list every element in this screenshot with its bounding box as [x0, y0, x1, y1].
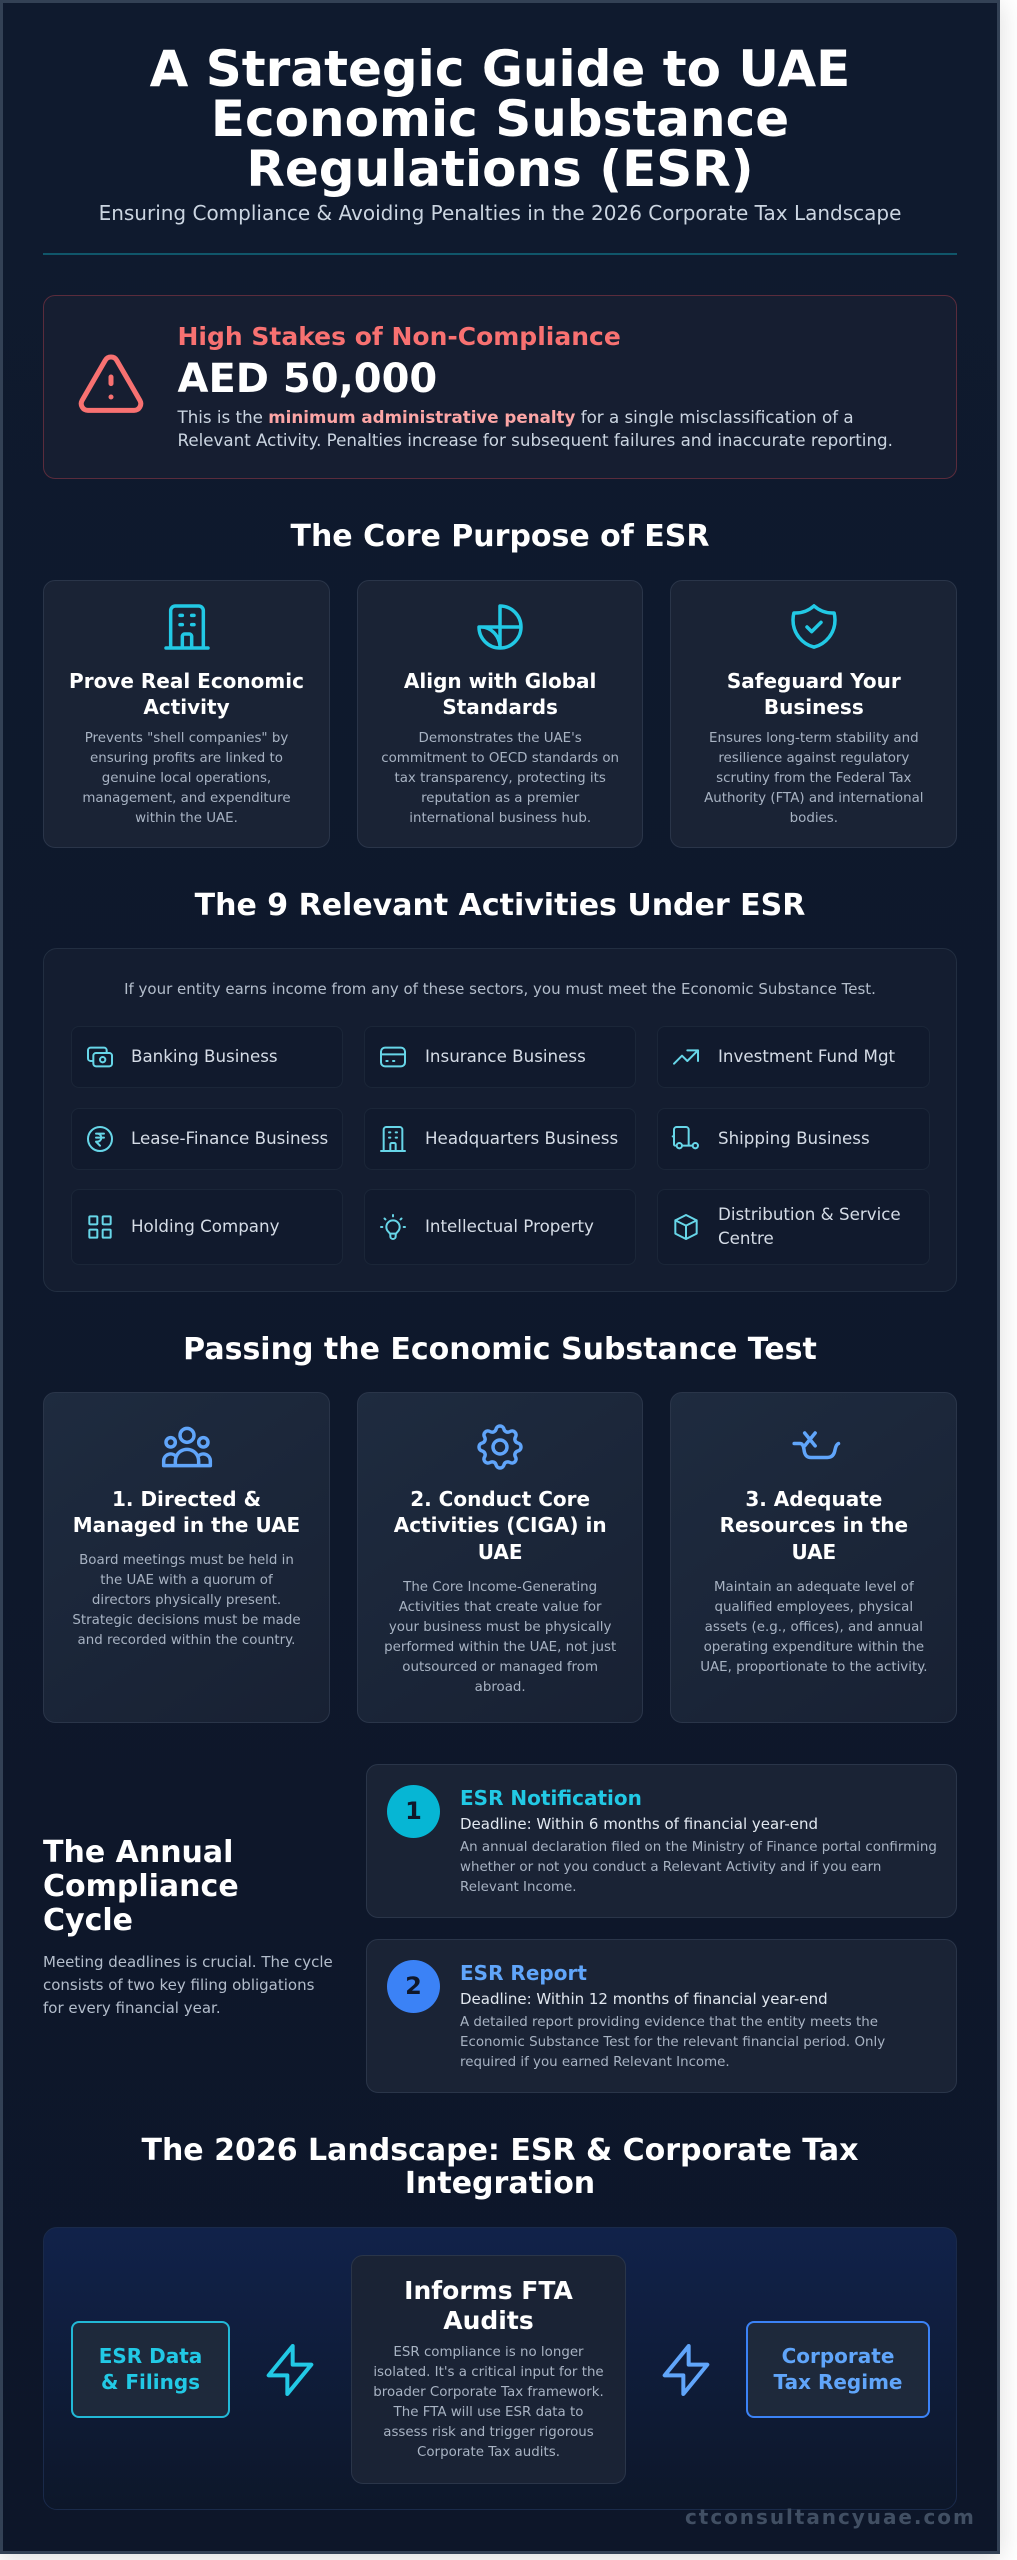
- card text: Board meetings must be held in: [79, 1552, 294, 1568]
- heading: annual compliance cycle: [43, 1835, 239, 1938]
- heading: core purpose: The Core Purpose of ESR: [290, 519, 710, 554]
- node text: [373, 2344, 604, 2460]
- label: [718, 1204, 901, 1248]
- card text: abroad.: [475, 1680, 526, 1694]
- step number: 2: [405, 1972, 422, 2000]
- title: A Strategic Guide to UAE: [150, 40, 850, 98]
- card text: [704, 730, 924, 826]
- card text: [381, 730, 619, 826]
- panel: core activities: [357, 1392, 643, 1723]
- activity: holding company: [71, 1189, 343, 1265]
- card text: your business must be physically: [389, 1620, 611, 1634]
- card title: Align with Global: [404, 669, 596, 693]
- alert text: Relevant Activity. Penalties increase for subsequent failures and inaccurate reporting.: [178, 430, 893, 450]
- icon: office building: [380, 1126, 406, 1152]
- label: Banking Business: [131, 1046, 278, 1066]
- alert heading: High Stakes of Non-Compliance: [178, 322, 621, 351]
- step text: whether or not you conduct a Relevant Activity and if you earn: [460, 1860, 881, 1875]
- label: Investment Fund Mgt: [718, 1046, 895, 1066]
- label: Lease-Finance Business: [131, 1128, 328, 1148]
- panel: relevant activities: [43, 948, 957, 1292]
- icon: warning triangle: [78, 354, 144, 413]
- icon: gear: [477, 1424, 523, 1470]
- heading: annual compliance cycle: Compliance: [43, 1869, 239, 1904]
- node: corporate tax regime: [746, 2321, 930, 2418]
- step text: [460, 1840, 937, 1895]
- icon: resources vessel: [792, 1431, 840, 1460]
- card text: bodies.: [790, 810, 838, 826]
- panel: adequate resources: [670, 1392, 957, 1723]
- card title: [73, 1487, 300, 1537]
- step text: [460, 2015, 885, 2070]
- panel: step 1 notification: [366, 1764, 957, 1918]
- card text: tax transparency, protecting its: [394, 770, 606, 786]
- icon: truck: [672, 1126, 699, 1150]
- node: ESR data and filings: [71, 2321, 230, 2418]
- node title: Informs FTA: [404, 2276, 573, 2304]
- card text: resilience against regulatory: [718, 750, 909, 766]
- activity: investment fund: [657, 1026, 930, 1088]
- node: corporate tax regime: Tax Regime: [774, 2370, 902, 2394]
- card text: scrutiny from the Federal Tax: [716, 770, 912, 786]
- node text: The FTA will use ESR data to: [394, 2404, 583, 2420]
- step number: [387, 1960, 440, 2013]
- card title: [720, 1487, 908, 1564]
- intro text: If your entity earns income from any of these sectors, you must meet the Economic Substance Test.: [124, 980, 876, 998]
- label: Centre: [718, 1228, 774, 1248]
- label: Shipping Business: [718, 1128, 870, 1148]
- card title: 2. Conduct Core: [410, 1487, 590, 1511]
- card text: Ensures long-term stability and: [709, 730, 919, 746]
- card text: Activities that create value for: [399, 1600, 602, 1614]
- step deadline: Deadline: Within 12 months of financial year-end: [460, 1990, 828, 2008]
- subtitle: Ensuring Compliance & Avoiding Penalties in the 2026 Corporate Tax Landscape: [99, 201, 901, 225]
- card title: [394, 1487, 607, 1564]
- activity: lease finance: [71, 1108, 343, 1170]
- card text: Prevents "shell companies" by: [85, 730, 288, 746]
- card title: [727, 669, 901, 719]
- card text: performed within the UAE, not just: [384, 1640, 616, 1654]
- node text: broader Corporate Tax framework.: [373, 2384, 604, 2400]
- activity: intellectual property: [364, 1189, 636, 1265]
- cycle description: for every financial year.: [43, 1999, 221, 2017]
- card text: qualified employees, physical: [715, 1600, 913, 1614]
- step text: required if you earned Relevant Income.: [460, 2055, 730, 2070]
- card text: reputation as a premier: [421, 790, 579, 806]
- node title: Audits: [443, 2306, 534, 2334]
- label: Insurance Business: [425, 1046, 586, 1066]
- panel: align with global standards: [357, 580, 643, 848]
- panel: directed and managed: [43, 1392, 330, 1723]
- step heading: ESR Report: [460, 1960, 587, 1984]
- cycle description: consists of two key filing obligations: [43, 1976, 314, 1994]
- title: [150, 40, 850, 198]
- panel: high stakes alert: [43, 295, 957, 479]
- card text: Maintain an adequate level of: [714, 1580, 914, 1594]
- icon: cash: [87, 1046, 113, 1068]
- card title: Business: [764, 695, 864, 719]
- card text: management, and expenditure: [82, 790, 291, 806]
- card title: Resources in the: [720, 1513, 908, 1537]
- card title: Prove Real Economic: [69, 669, 304, 693]
- activity: distribution and service centre: [657, 1189, 930, 1265]
- card text: [72, 1552, 301, 1648]
- card text: Demonstrates the UAE's: [419, 730, 582, 746]
- node: ESR data and filings: ESR Data: [99, 2344, 202, 2368]
- icon: globe segments: [477, 604, 523, 650]
- card text: within the UAE.: [135, 810, 238, 826]
- card title: 3. Adequate: [745, 1487, 882, 1511]
- card title: 1. Directed &: [112, 1487, 261, 1511]
- card text: UAE, proportionate to the activity.: [700, 1660, 927, 1674]
- title: Economic Substance: [211, 90, 789, 148]
- node text: isolated. It's a critical input for the: [373, 2364, 604, 2380]
- card title: UAE: [791, 1540, 836, 1564]
- card text: operating expenditure within the: [704, 1640, 924, 1654]
- card title: Activity: [143, 695, 230, 719]
- card text: international business hub.: [409, 810, 591, 826]
- heading: 2026 landscape: Integration: [405, 2166, 595, 2201]
- card text: genuine local operations,: [102, 770, 271, 786]
- cycle description: Meeting deadlines is crucial. The cycle: [43, 1953, 333, 1971]
- alert text: [177, 407, 893, 450]
- node text: assess risk and trigger rigorous: [383, 2424, 594, 2440]
- icon: card: [380, 1046, 406, 1068]
- heading: annual compliance cycle: The Annual: [43, 1835, 233, 1870]
- card title: Safeguard Your: [727, 669, 901, 693]
- icon: building: [164, 604, 210, 650]
- step text: A detailed report providing evidence that the entity meets the: [460, 2015, 878, 2030]
- step number: 1: [405, 1797, 422, 1825]
- step number: [387, 1785, 440, 1838]
- card title: Managed in the UAE: [73, 1513, 300, 1537]
- card text: the UAE with a quorum of: [100, 1572, 273, 1588]
- panel: prove real economic activity: [43, 580, 330, 848]
- card text: Strategic decisions must be made: [72, 1612, 301, 1628]
- heading: relevant activities: The 9 Relevant Activities Under ESR: [195, 888, 805, 923]
- label: Headquarters Business: [425, 1128, 618, 1148]
- node title: [404, 2276, 573, 2334]
- arrow: bolt to audits: [266, 2344, 314, 2396]
- icon: light bulb: [380, 1214, 406, 1240]
- card text: [82, 730, 291, 826]
- label: Distribution & Service: [718, 1204, 901, 1224]
- step text: Relevant Income.: [460, 1880, 577, 1895]
- node: corporate tax regime: Corporate: [782, 2344, 894, 2368]
- title: Regulations (ESR): [246, 140, 754, 198]
- step heading: ESR Notification: [460, 1786, 642, 1810]
- step text: An annual declaration filed on the Ministry of Finance portal confirming: [460, 1840, 937, 1855]
- icon: rupee: [87, 1126, 113, 1152]
- step deadline: Deadline: Within 6 months of financial year-end: [460, 1814, 818, 1832]
- penalty figure: AED 50,000: [178, 356, 437, 402]
- node text: ESR compliance is no longer: [393, 2344, 584, 2360]
- card title: Activities (CIGA) in: [394, 1513, 607, 1537]
- node: informs FTA audits: [351, 2255, 626, 2484]
- card text: directors physically present.: [92, 1592, 281, 1608]
- node: ESR data and filings: & Filings: [101, 2370, 200, 2394]
- icon: shield check: [791, 604, 837, 649]
- icon: trending up: [673, 1049, 699, 1065]
- activity: headquarters: [364, 1108, 636, 1170]
- heading: 2026 landscape: The 2026 Landscape: ESR & Corporate Tax: [141, 2133, 858, 2168]
- label: Holding Company: [131, 1216, 280, 1236]
- node text: Corporate Tax audits.: [417, 2444, 560, 2460]
- alert text: This is the minimum administrative penalty for a single misclassification of a: [178, 407, 854, 427]
- activity: shipping: [657, 1108, 930, 1170]
- cycle description: [43, 1953, 333, 2017]
- panel: integration flow: [43, 2227, 957, 2510]
- card text: assets (e.g., offices), and annual: [705, 1620, 923, 1634]
- watermark: ctconsultancyuae.com: [685, 2504, 976, 2528]
- card title: Standards: [442, 695, 558, 719]
- icon: grid: [88, 1215, 112, 1239]
- card title: [404, 669, 596, 719]
- icon: people group: [162, 1426, 212, 1468]
- panel: step 2 report: [366, 1939, 957, 2093]
- heading: 2026 landscape: [141, 2133, 858, 2201]
- card text: ensuring profits are linked to: [90, 750, 283, 766]
- label: Intellectual Property: [425, 1216, 594, 1236]
- card text: Authority (FTA) and international: [704, 790, 924, 806]
- card text: [384, 1580, 616, 1694]
- heading: annual compliance cycle: Cycle: [43, 1903, 133, 1938]
- icon: cube: [674, 1214, 698, 1240]
- card title: [69, 669, 304, 719]
- activity: insurance: [364, 1026, 636, 1088]
- card title: UAE: [478, 1540, 523, 1564]
- heading: substance test: Passing the Economic Substance Test: [183, 1332, 817, 1367]
- card text: and recorded within the country.: [78, 1632, 295, 1648]
- card text: The Core Income-Generating: [403, 1580, 597, 1594]
- activity: banking: [71, 1026, 343, 1088]
- arrow: bolt to tax regime: [662, 2344, 710, 2396]
- card text: [700, 1580, 927, 1674]
- card text: commitment to OECD standards on: [381, 750, 619, 766]
- step text: Economic Substance Test for the relevant financial period. Only: [460, 2035, 885, 2050]
- card text: outsourced or managed from: [402, 1660, 598, 1674]
- panel: safeguard your business: [670, 580, 957, 848]
